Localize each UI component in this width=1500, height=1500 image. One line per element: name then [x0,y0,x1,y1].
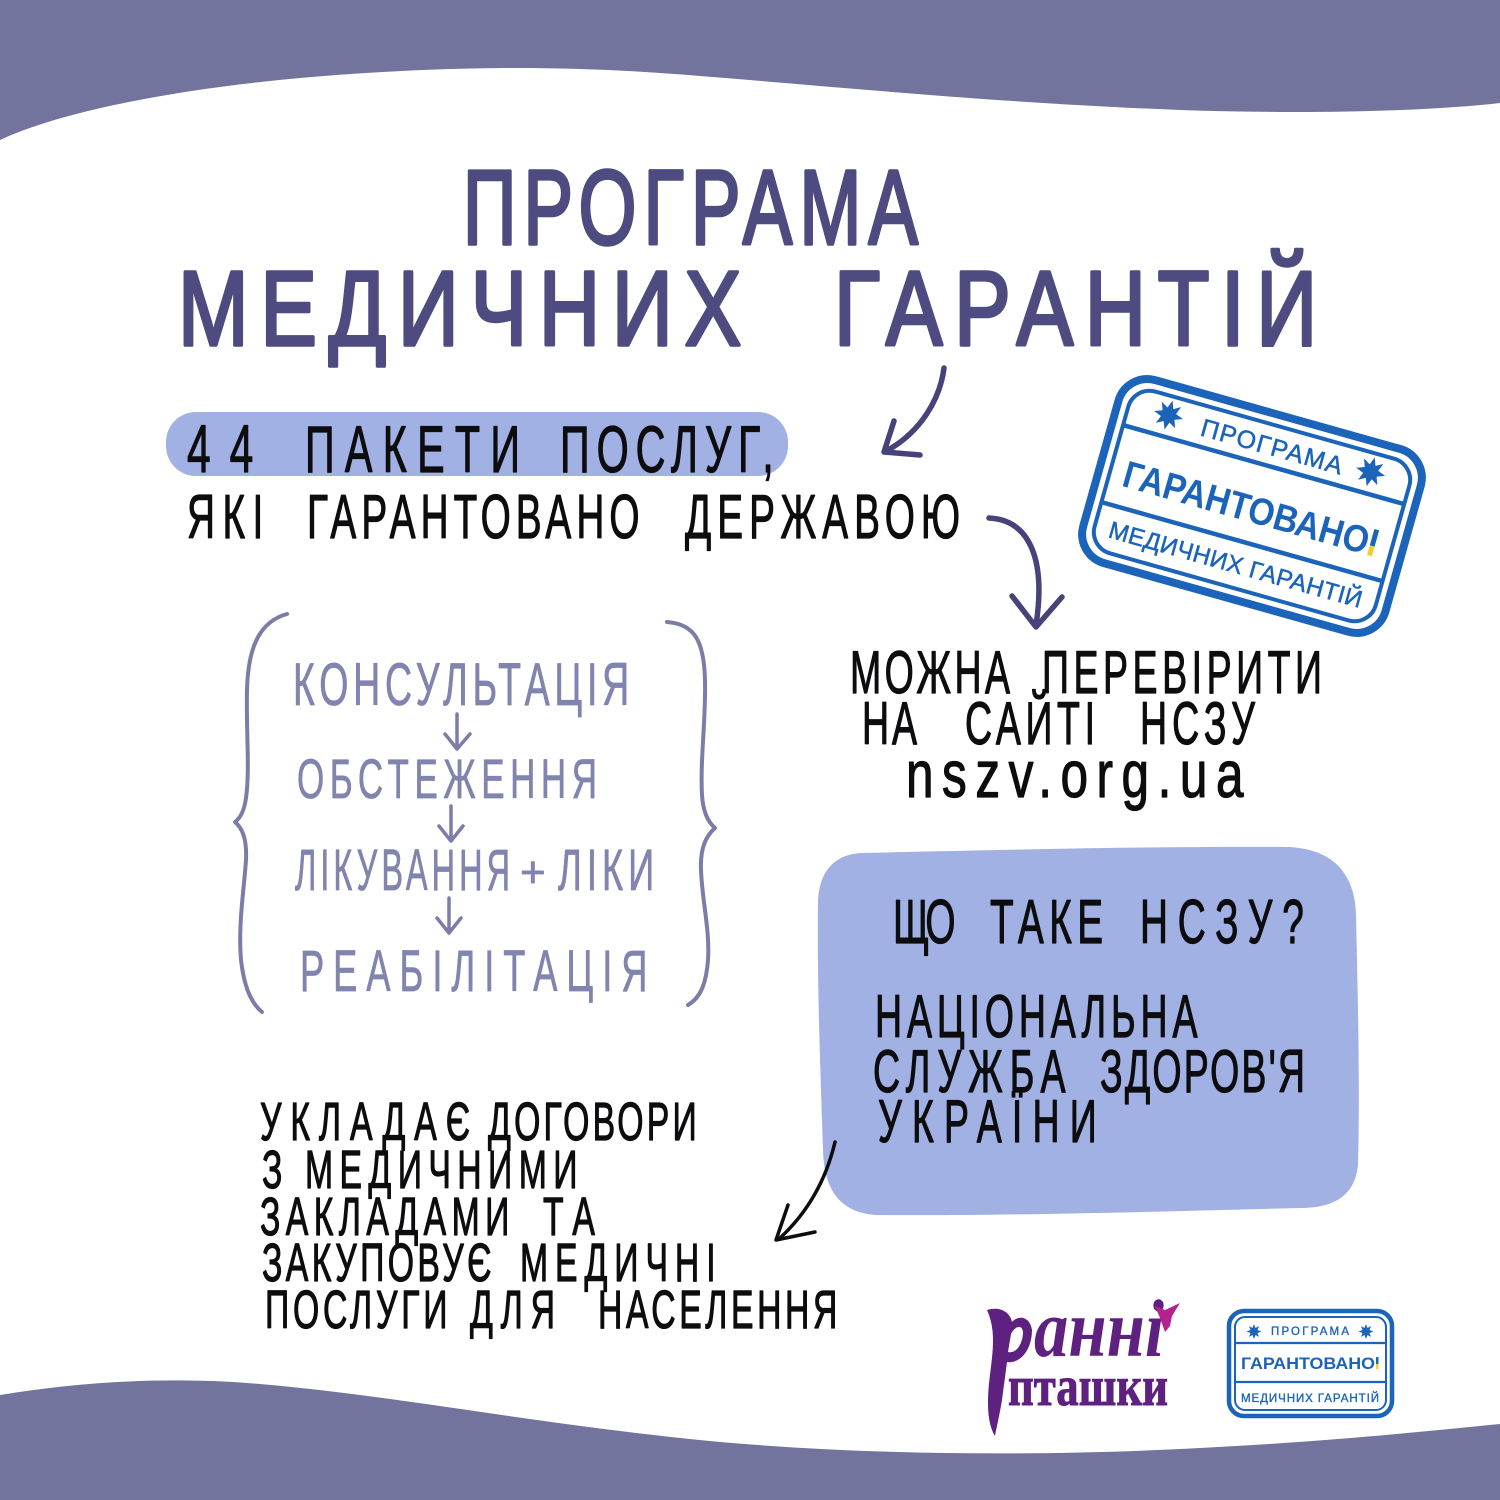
website note [850,639,1322,812]
arrow: to website [989,518,1062,627]
icon: star left [1150,397,1187,434]
panel text: СЛУЖБА [873,1038,1066,1105]
care pathway list: РЕАБІЛІТАЦІЯ [300,939,647,1004]
stamp: large tilted [1075,372,1429,640]
heading: 44 packages: 44 [187,412,253,488]
heading: 44 packages: ПОСЛУГ, [560,412,774,486]
heading: 44 packages: ДЕРЖАВОЮ [685,482,960,551]
heading: 44 packages: ЯКІ [187,482,263,551]
website note: НА [862,690,917,757]
stamp: large tilted: ГАРАНТОВАНО [1118,454,1374,563]
contracts note: МЕДИЧНИМИ [305,1139,578,1200]
icon: small star right [1358,1324,1374,1339]
left brace [235,614,287,1012]
care pathway list: ОБСТЕЖЕННЯ [297,748,597,810]
contracts note: НАСЕЛЕННЯ [598,1279,837,1340]
contracts note: ЗАКЛАДАМИ [260,1186,509,1247]
panel text [873,887,1305,1155]
logo: early birds: анні [1034,1283,1164,1374]
highlight pill [166,412,788,476]
care pathway list: ЛІКИ [558,838,654,903]
arrow: title to packages [884,368,944,455]
panel text: НАЦІОНАЛЬНА [875,983,1198,1050]
contracts note: ТА [543,1186,595,1247]
title: МЕДИЧНИХ [178,250,741,368]
stamp: small: ГАРАНТОВАНО [1241,1354,1375,1373]
care pathway list: ЛІКУВАННЯ [295,837,510,902]
panel: what is NHSU [818,847,1359,1215]
website note: НСЗУ [1140,690,1256,757]
arrow: step 1 [445,714,470,749]
stamp: small [1229,1311,1392,1416]
care pathway list: КОНСУЛЬТАЦІЯ [293,651,629,718]
contracts note: З [262,1139,282,1200]
stamp: small: ПРОГРАМА [1271,1326,1349,1338]
heading: 44 packages: ПАКЕТИ [305,412,520,486]
panel text: ЩО [893,887,956,956]
title [178,149,1317,368]
title: ПРОГРАМА [463,149,918,267]
arrow: panel to contracts [776,1142,835,1240]
contracts note: УКЛАДАЄ [260,1091,470,1152]
bottom wave band [0,1380,1500,1500]
website note: nszv.org.ua [906,738,1244,812]
contracts note: ДЛЯ [470,1279,555,1340]
contracts note: ПОСЛУГИ [265,1279,448,1340]
logo: early birds [987,1283,1180,1436]
panel text: НСЗУ? [1140,887,1304,956]
right brace [667,622,715,1005]
care pathway list: + [520,848,546,897]
title: ГАРАНТІЙ [834,249,1317,368]
heading: 44 packages: ГАРАНТОВАНО [307,482,640,551]
logo: early birds: пташки [1008,1356,1168,1418]
contracts note: ДОГОВОРИ [488,1091,697,1152]
stamp: large tilted: ПРОГРАМА [1198,414,1346,480]
panel text: ТАКЕ [990,887,1103,956]
contracts note [260,1091,837,1340]
icon: small star left [1246,1324,1262,1339]
arrow: step 2 [439,806,463,841]
contracts note: ЗАКУПОВУЄ [262,1232,491,1293]
contracts note: МЕДИЧНІ [520,1232,716,1293]
stamp: small: МЕДИЧНИХ ГАРАНТІЙ [1241,1392,1379,1405]
website note: ПЕРЕВІРИТИ [1042,639,1322,706]
panel text: УКРАЇНИ [878,1088,1097,1155]
website note: МОЖНА [850,639,1010,706]
heading: 44 packages [187,412,960,551]
website note: САЙТІ [965,689,1095,757]
icon: star right [1352,453,1389,490]
stamp: large tilted: МЕДИЧНИХ ГАРАНТІЙ [1106,516,1365,614]
top wave band [0,0,1500,140]
icon: bird [1155,1303,1180,1332]
panel text: ЗДОРОВ'Я [1100,1038,1305,1105]
care pathway list [293,651,654,1004]
arrow: step 3 [437,898,461,933]
